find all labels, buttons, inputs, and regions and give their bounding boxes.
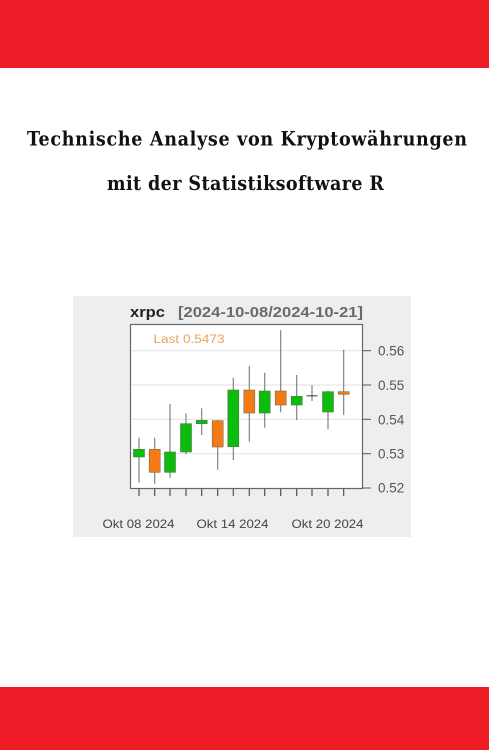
- y axis labels: 0.54: [378, 412, 405, 427]
- chart title: [130, 305, 363, 321]
- orange candles: [149, 390, 349, 472]
- y axis labels: 0.56: [378, 344, 404, 358]
- x axis ticks: [139, 489, 344, 496]
- plot area: [130, 324, 362, 488]
- green candles: [134, 390, 334, 472]
- top red band: [0, 0, 489, 68]
- chart background: [73, 296, 411, 537]
- x axis labels: Okt 14 2024: [196, 517, 269, 531]
- y axis labels: 0.52: [378, 480, 404, 496]
- last price label: Last 0.5473: [154, 334, 224, 346]
- y axis labels: [378, 344, 405, 496]
- bottom red band: [0, 687, 489, 750]
- chart title: xrpc: [130, 305, 165, 321]
- x axis labels: Okt 20 2024: [292, 517, 364, 531]
- x axis labels: Okt 08 2024: [102, 517, 175, 531]
- title: mit der Statistiksoftware R: [107, 172, 384, 195]
- title: Technische Analyse von Kryptowährungen: [27, 128, 467, 150]
- title: [27, 128, 467, 195]
- y axis labels: 0.55: [378, 378, 404, 393]
- y axis ticks: [362, 351, 371, 488]
- wicks: [139, 330, 344, 484]
- doji candle: [306, 395, 318, 397]
- chart title: [2024-10-08/2024-10-21]: [178, 305, 363, 321]
- y axis labels: 0.53: [378, 446, 404, 462]
- x axis labels: [102, 517, 364, 531]
- candlestick chart: [73, 296, 411, 537]
